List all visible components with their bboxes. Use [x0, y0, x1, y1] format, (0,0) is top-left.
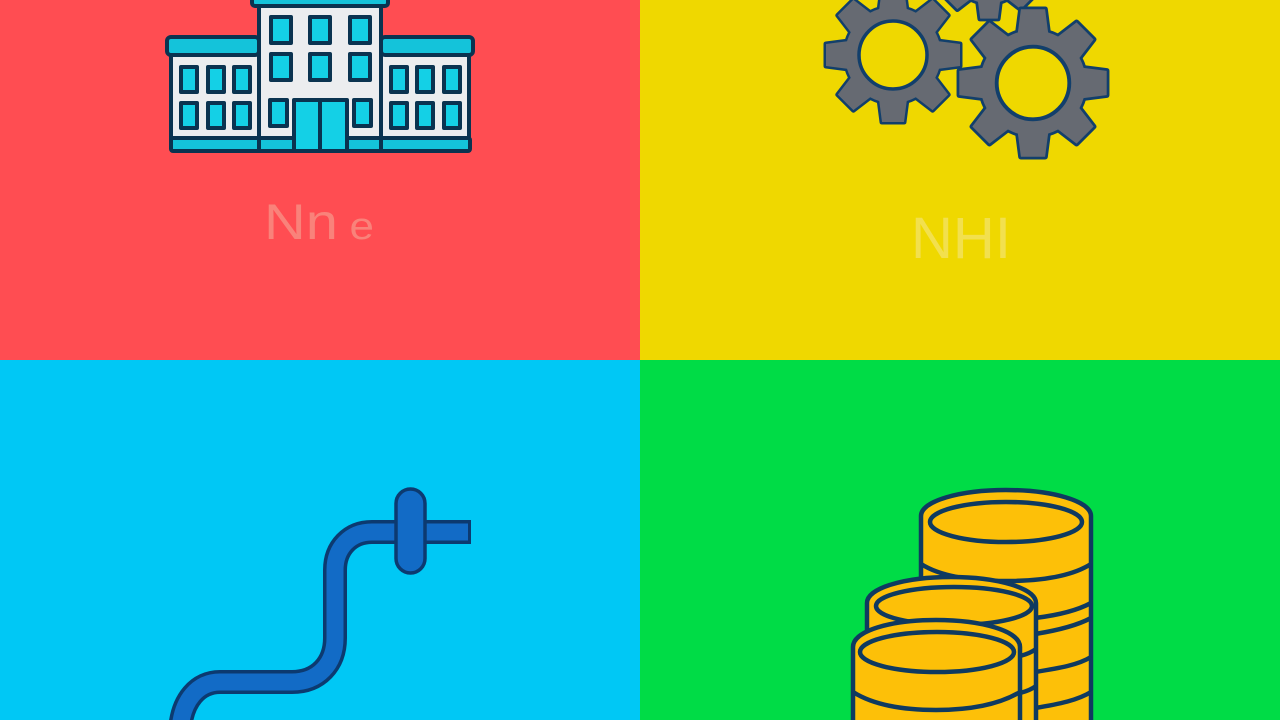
icon: building — [167, 0, 473, 151]
panel: blue pipe — [0, 360, 640, 720]
panel: red building — [0, 0, 640, 360]
label: NHI: NHI — [911, 206, 1011, 271]
panel: yellow gears — [640, 0, 1280, 360]
icon: pipe with valve — [180, 489, 471, 720]
icon: coin stacks — [853, 490, 1091, 720]
label: faded red panel text: Nn e — [264, 194, 374, 250]
coin stack: front — [853, 620, 1020, 720]
panel: green coins — [640, 360, 1280, 720]
coin stack: middle — [867, 577, 1036, 720]
icon: gears — [826, 0, 1107, 157]
coin stack: back — [921, 490, 1091, 720]
